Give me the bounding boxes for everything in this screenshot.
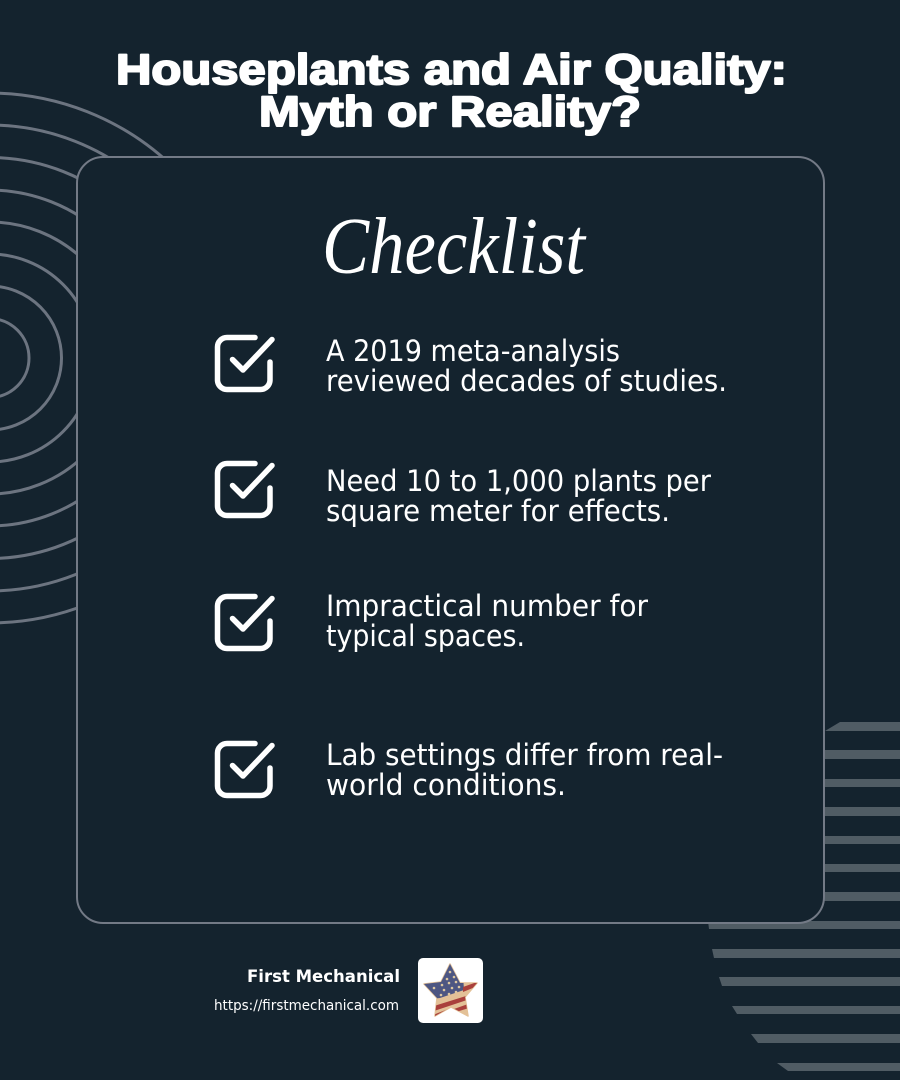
text: item 2	[326, 464, 711, 528]
text: item 2: square meter for effects.	[326, 494, 670, 528]
text: item 4	[326, 738, 723, 802]
logo: star with flag	[418, 958, 483, 1023]
text: item 4: world conditions.	[326, 768, 566, 802]
heading: Checklist: Checklist	[322, 203, 587, 291]
panel: checklist card	[77, 157, 824, 923]
title: Myth or Reality?	[259, 88, 641, 136]
title	[116, 46, 787, 136]
icon: checkbox 1	[218, 338, 272, 390]
footer: company name: First Mechanical	[247, 967, 400, 986]
icon: checkbox 4	[218, 744, 272, 796]
text: item 1	[326, 334, 727, 398]
icon: checkbox 3	[218, 596, 272, 648]
text: item 1: A 2019 meta-analysis	[326, 334, 620, 368]
text: item 2: Need 10 to 1,000 plants per	[326, 464, 711, 498]
icon: checkbox 2	[218, 464, 272, 516]
text: item 3: typical spaces.	[326, 619, 525, 653]
text: item 3: Impractical number for	[326, 589, 648, 623]
text: item 3	[326, 589, 648, 653]
footer: website url: https://firstmechanical.com	[214, 998, 399, 1014]
title: Houseplants and Air Quality:	[116, 46, 787, 94]
text: item 1: reviewed decades of studies.	[326, 364, 727, 398]
text: item 4: Lab settings differ from real-	[326, 738, 723, 772]
